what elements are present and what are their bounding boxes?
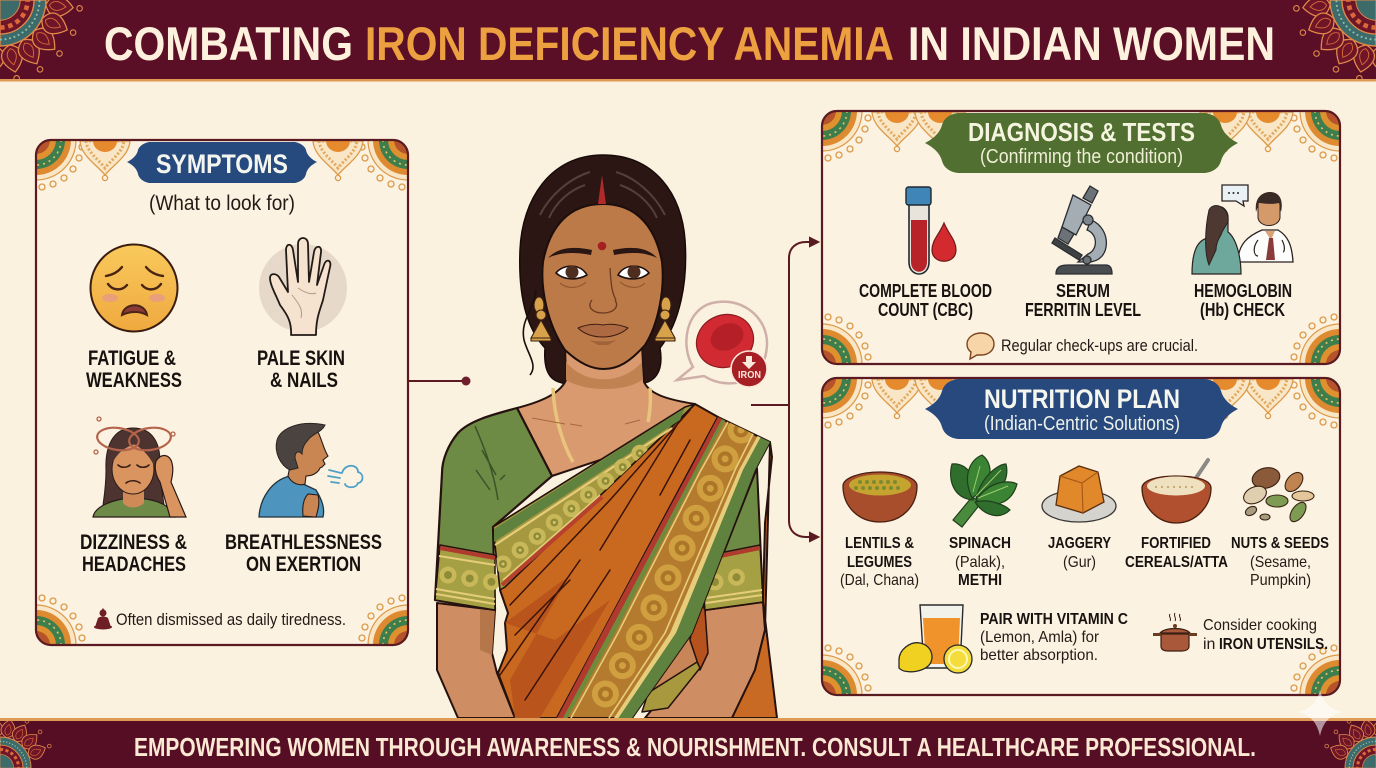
arrow: connector to diagnosis and nutrition — [751, 238, 818, 541]
label: lentils and legumes — [840, 535, 919, 589]
eyes — [556, 266, 649, 287]
saree upper border band — [493, 404, 695, 590]
label: spinach and methi — [949, 535, 1011, 589]
label: fortified cereals: CEREALS/ATTA — [1125, 554, 1228, 571]
label: jaggery: (Gur) — [1063, 554, 1096, 571]
earrings — [531, 297, 675, 341]
note: iron utensils: Consider cooking — [1203, 617, 1317, 634]
label: spinach and methi: SPINACH — [949, 535, 1011, 552]
nutrition heading ribbon — [925, 379, 1238, 439]
decorative mandala top corners — [0, 0, 1376, 83]
label: serum ferritin level — [1025, 281, 1141, 320]
note: pair with vitamin C: PAIR WITH VITAMIN C — [980, 611, 1128, 628]
nose — [590, 268, 617, 313]
right fold and lower band — [690, 597, 708, 670]
label: dizziness and headaches: DIZZINESS & — [80, 531, 187, 554]
icon: jaggery on plate — [1042, 466, 1116, 522]
label: fatigue and weakness — [86, 347, 182, 392]
lips — [578, 324, 628, 337]
diagnosis heading ribbon — [925, 113, 1238, 173]
icon: dizzy woman — [93, 417, 186, 517]
icon: blood test tube and drop — [906, 187, 956, 274]
icon: cereal bowl and spoon — [1142, 460, 1211, 523]
symptoms heading ribbon: SYMPTOMS — [156, 149, 288, 179]
neck and chest — [517, 345, 695, 476]
loose hair strand — [523, 290, 536, 375]
label: jaggery: JAGGERY — [1048, 535, 1111, 552]
icon: speech bubble — [967, 333, 994, 359]
icon: lentils bowl — [843, 472, 917, 522]
label: dizziness and headaches: HEADACHES — [82, 553, 186, 576]
note: regular check-ups — [967, 333, 1198, 359]
note: regular check-ups: Regular check-ups are crucial. — [1001, 336, 1198, 355]
symptoms heading ribbon — [127, 142, 317, 183]
icon: meditating figure — [94, 608, 112, 630]
label: serum ferritin level: FERRITIN LEVEL — [1025, 300, 1141, 320]
label: serum ferritin level: SERUM — [1056, 281, 1110, 301]
note: iron utensils — [1203, 617, 1328, 653]
note: pair with vitamin C: (Lemon, Amla) for — [980, 629, 1100, 646]
icon: breathless man — [259, 423, 363, 517]
label: breathlessness on exertion: ON EXERTION — [246, 553, 361, 576]
figure: Indian woman in saree — [435, 155, 777, 718]
arrow: symptoms connector — [408, 376, 470, 386]
icon: juice and lemons — [899, 605, 972, 673]
icon: iron pot — [1153, 613, 1197, 651]
midriff — [648, 633, 698, 693]
label: lentils and legumes: (Dal, Chana) — [840, 572, 919, 589]
label: fortified cereals: FORTIFIED — [1141, 535, 1211, 552]
label: breathlessness on exertion — [225, 531, 382, 576]
label: complete blood count: COMPLETE BLOOD — [859, 281, 992, 301]
label: nuts and seeds: NUTS & SEEDS — [1231, 535, 1329, 552]
callout: low iron red blood cell: IRON — [738, 369, 761, 381]
label: hemoglobin check: (Hb) CHECK — [1200, 300, 1285, 320]
saree main drape — [498, 404, 718, 718]
left sleeve border — [435, 545, 495, 610]
sindoor and bindi — [598, 175, 606, 204]
label: complete blood count — [859, 281, 992, 320]
note: iron utensils: in — [1203, 636, 1215, 653]
label: spinach and methi: METHI — [958, 572, 1002, 589]
right pallu behind — [732, 442, 777, 718]
label: pale skin and nails — [257, 347, 345, 392]
header banner — [0, 0, 1376, 83]
label: jaggery — [1048, 535, 1111, 571]
diagnosis heading ribbon: (Confirming the condition) — [980, 146, 1183, 168]
label: fatigue and weakness: WEAKNESS — [86, 369, 182, 392]
note: pair with vitamin C — [980, 611, 1128, 664]
diagnosis heading ribbon: DIAGNOSIS & TESTS — [968, 117, 1195, 147]
icon: pale hand — [259, 238, 347, 335]
label: lentils and legumes: LENTILS & — [845, 535, 914, 552]
label: nuts and seeds: Pumpkin) — [1250, 572, 1311, 589]
callout: low iron red blood cell — [677, 302, 767, 387]
title — [104, 17, 1275, 70]
label: fortified cereals — [1125, 535, 1228, 571]
label: fatigue and weakness: FATIGUE & — [88, 347, 176, 370]
symptoms footnote: Often dismissed as daily tiredness. — [116, 610, 346, 629]
left arm — [437, 603, 515, 718]
label: breathlessness on exertion: BREATHLESSNESS — [225, 531, 382, 554]
label: nuts and seeds — [1231, 535, 1329, 589]
icon: microscope — [1052, 186, 1112, 274]
footer banner — [0, 718, 1376, 768]
right arm — [645, 602, 765, 718]
sparkle watermark — [1298, 690, 1342, 736]
label: complete blood count: COUNT (CBC) — [878, 300, 973, 320]
note: pair with vitamin C: better absorption. — [980, 647, 1098, 664]
symptoms subheading: (What to look for) — [149, 192, 295, 215]
panel: diagnosis and tests — [820, 110, 1342, 366]
label: hemoglobin check: HEMOGLOBIN — [1194, 281, 1292, 301]
right sleeve border — [703, 545, 763, 610]
decorative mandala footer — [0, 721, 1376, 768]
hair back — [520, 155, 686, 384]
label: hemoglobin check — [1194, 281, 1292, 320]
label: nuts and seeds: (Sesame, — [1250, 554, 1311, 571]
label: lentils and legumes: LEGUMES — [847, 554, 912, 571]
icon: spinach bunch — [951, 455, 1017, 527]
icon: nuts and seeds — [1241, 465, 1314, 524]
panel: symptoms — [34, 138, 410, 646]
icon: tired face — [90, 244, 178, 332]
icon: doctor and patient — [1192, 185, 1293, 274]
face — [542, 204, 663, 369]
saree right border band — [557, 417, 770, 718]
panel: nutrition plan — [820, 376, 1342, 696]
label: dizziness and headaches — [80, 531, 187, 576]
blouse left — [435, 408, 552, 610]
title: IRON DEFICIENCY ANEMIA — [365, 17, 894, 70]
title: IN INDIAN WOMEN — [908, 17, 1275, 70]
nutrition heading ribbon: NUTRITION PLAN — [984, 384, 1180, 414]
label: pale skin and nails: & NAILS — [270, 369, 338, 392]
nutrition heading ribbon: (Indian-Centric Solutions) — [984, 413, 1180, 435]
necklace — [553, 388, 650, 462]
brows — [548, 248, 657, 258]
note: iron utensils: IRON UTENSILS. — [1219, 636, 1328, 653]
label: pale skin and nails: PALE SKIN — [257, 347, 345, 370]
title: COMBATING — [104, 17, 353, 70]
label: spinach and methi: (Palak), — [955, 554, 1005, 571]
blouse right — [692, 468, 763, 633]
